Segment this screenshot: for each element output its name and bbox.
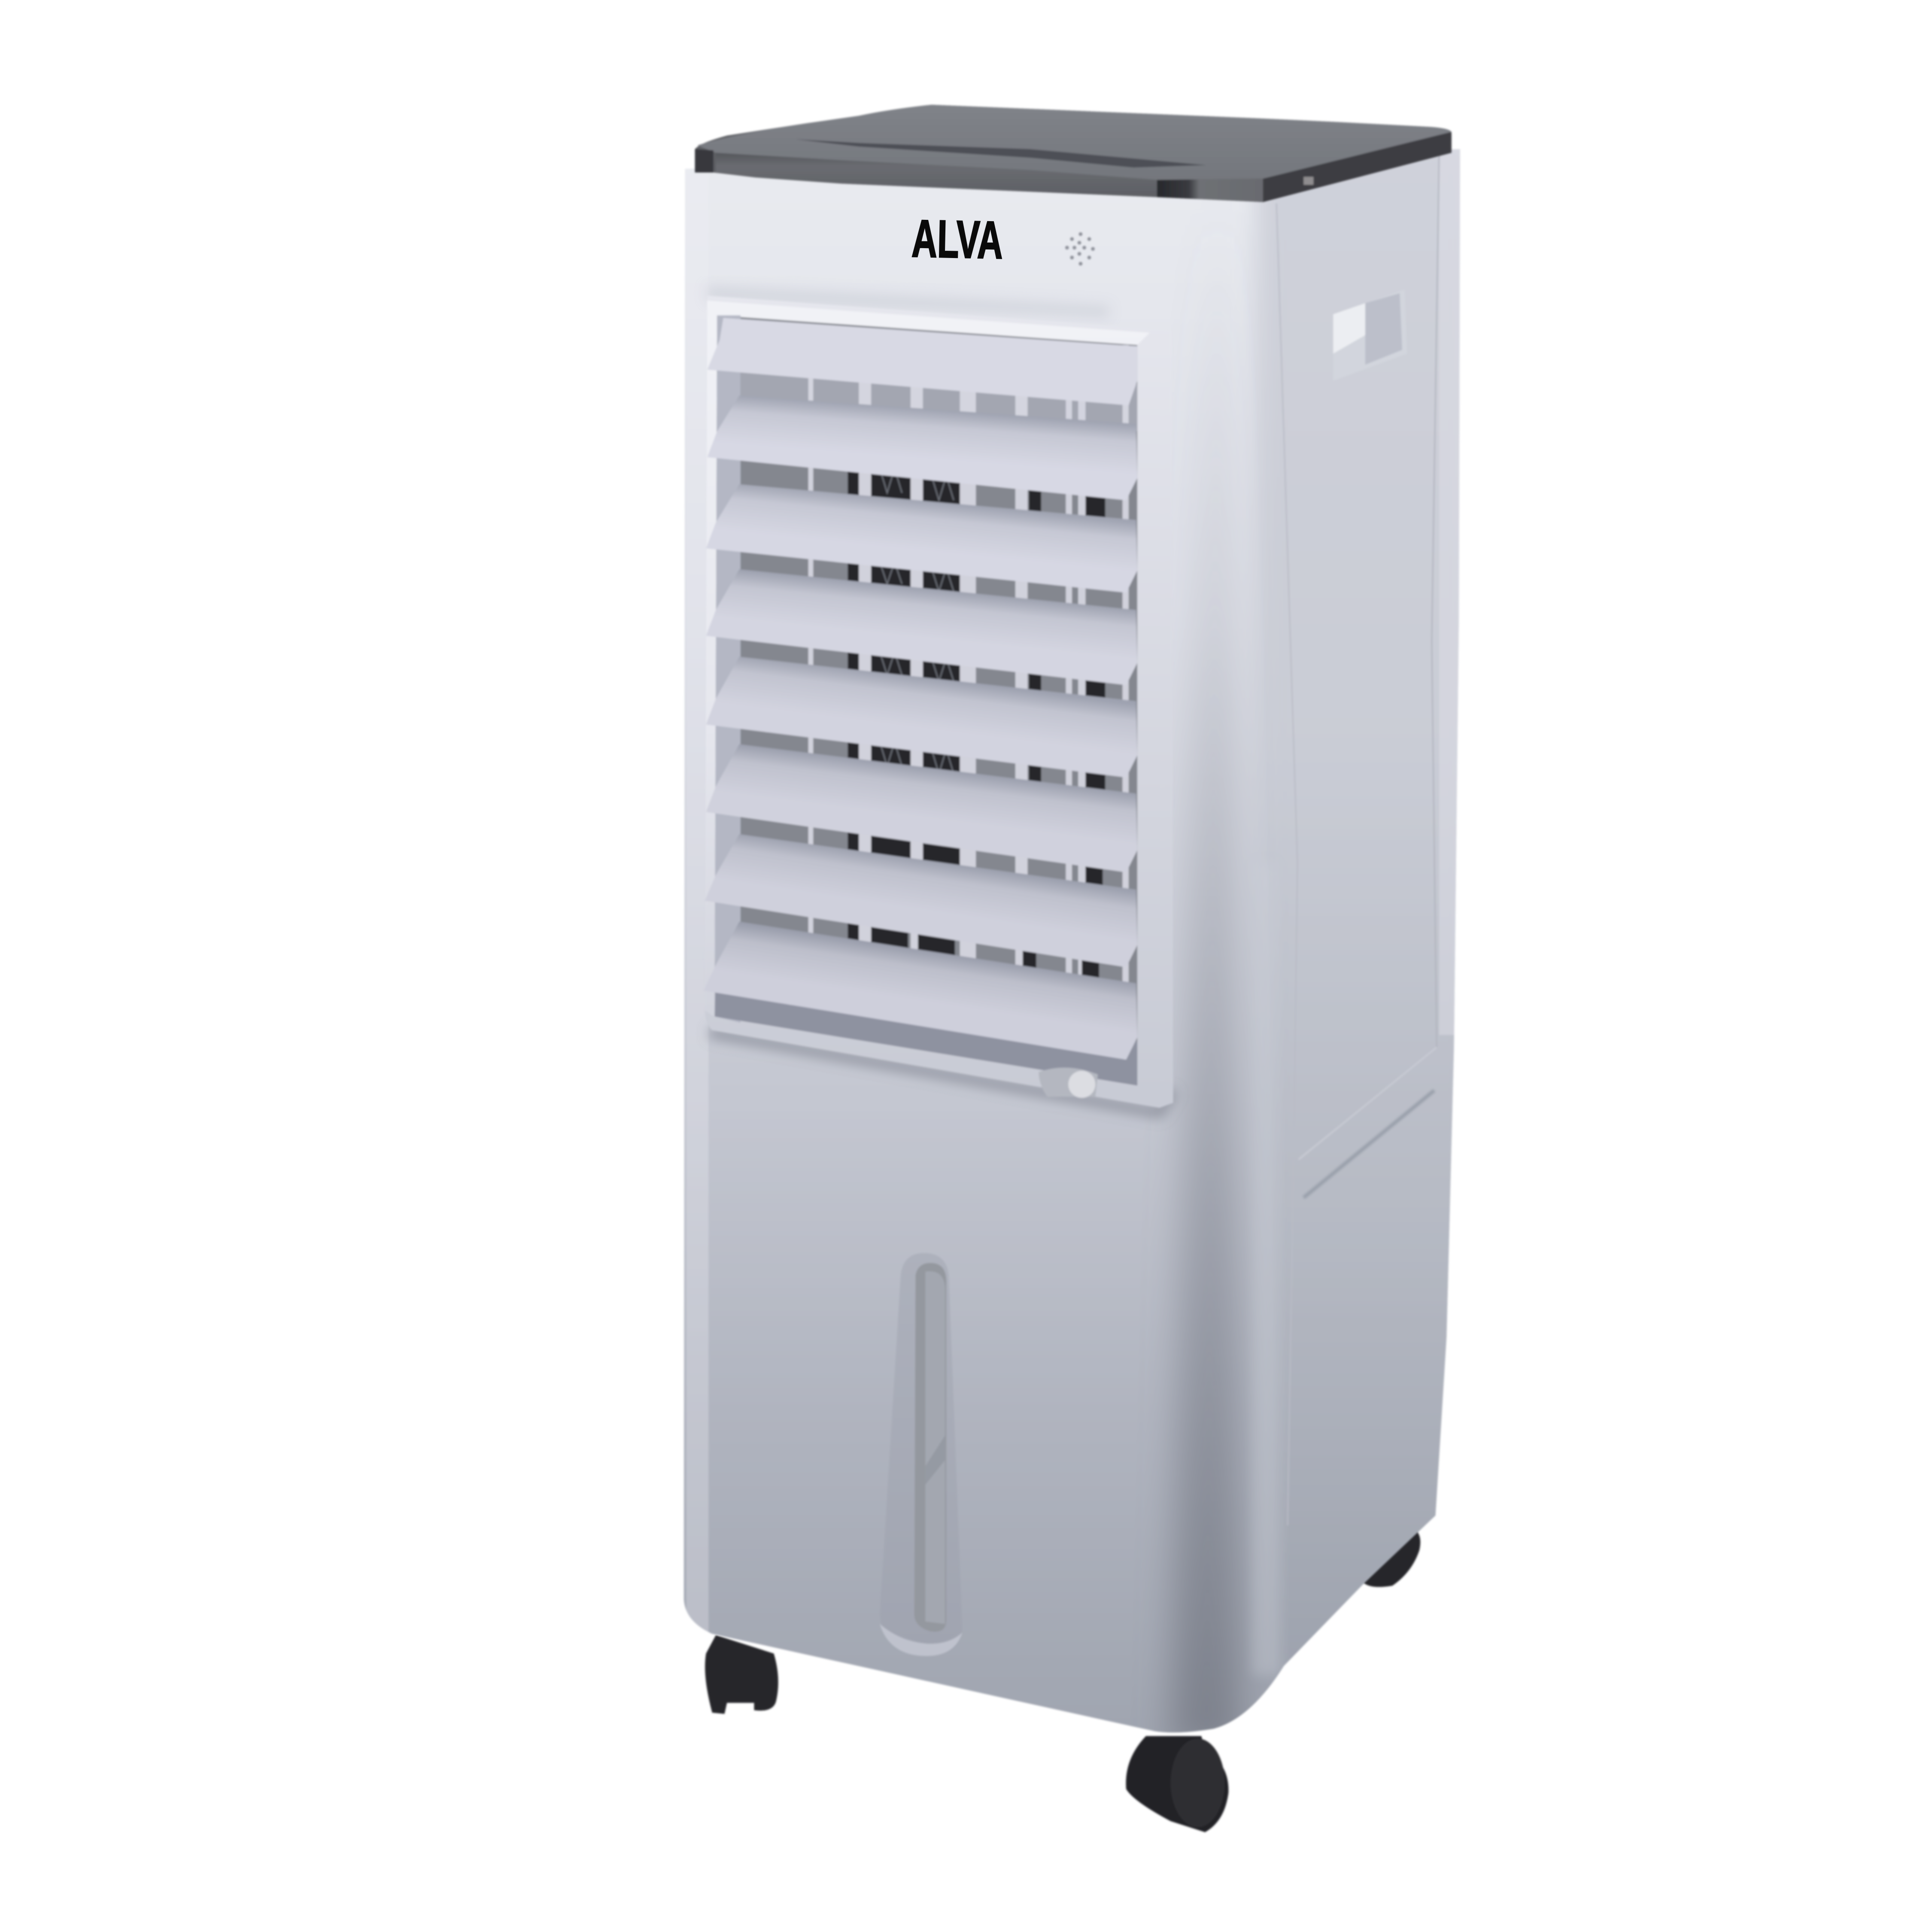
grille opening (715, 316, 1137, 1085)
first row lighter backing (741, 357, 1137, 431)
bright inner frame strips (705, 301, 1150, 1018)
lid left corner (695, 149, 714, 173)
cooler body (684, 136, 1479, 1750)
water level gauge (880, 1253, 962, 1656)
row below louver 3 (848, 557, 859, 592)
louver 7 (705, 834, 1137, 967)
louver 5 (706, 657, 1137, 778)
row below louver 7 (848, 917, 859, 951)
wheel: rear right (1363, 1528, 1420, 1587)
panel frame (705, 296, 1173, 1108)
brand logo: ALVA (911, 209, 1003, 270)
row below louver 4 (848, 646, 859, 680)
louver panel (704, 286, 1173, 1113)
louver 4 (706, 569, 1137, 685)
row below louver 5 (848, 735, 859, 770)
louver 2 (707, 395, 1137, 500)
adjustment knob (1039, 1068, 1098, 1097)
side face tone (1251, 149, 1460, 1186)
louver 1 (707, 318, 1137, 405)
side panel seam lines (1276, 204, 1297, 1525)
louver 6 (706, 744, 1137, 872)
black fan blades seen through grille (848, 463, 1105, 990)
louver 8 (704, 922, 1137, 1060)
lid (695, 105, 1452, 202)
lid front corner block (1157, 179, 1263, 202)
row below louver 2 (848, 463, 859, 498)
fan lattice lines (880, 468, 954, 774)
lid side band (1263, 132, 1452, 202)
corner shading between front and side faces (1170, 197, 1242, 1750)
panel frame shadow (710, 1033, 1173, 1113)
illustration: ALVA air cooler (683, 103, 1461, 1833)
lid front band (716, 153, 1157, 197)
speaker holes (1065, 232, 1095, 265)
lid slot (795, 139, 1206, 167)
wheel: front right (1126, 1736, 1228, 1832)
panel top shade band (707, 286, 1109, 318)
lower opening under last louver (715, 973, 1137, 1085)
wheel: front left (705, 1635, 778, 1714)
louver 3 (706, 484, 1137, 592)
grille bars (808, 345, 1129, 998)
row below louver 6 (848, 826, 859, 860)
side carry handle (1333, 289, 1407, 381)
